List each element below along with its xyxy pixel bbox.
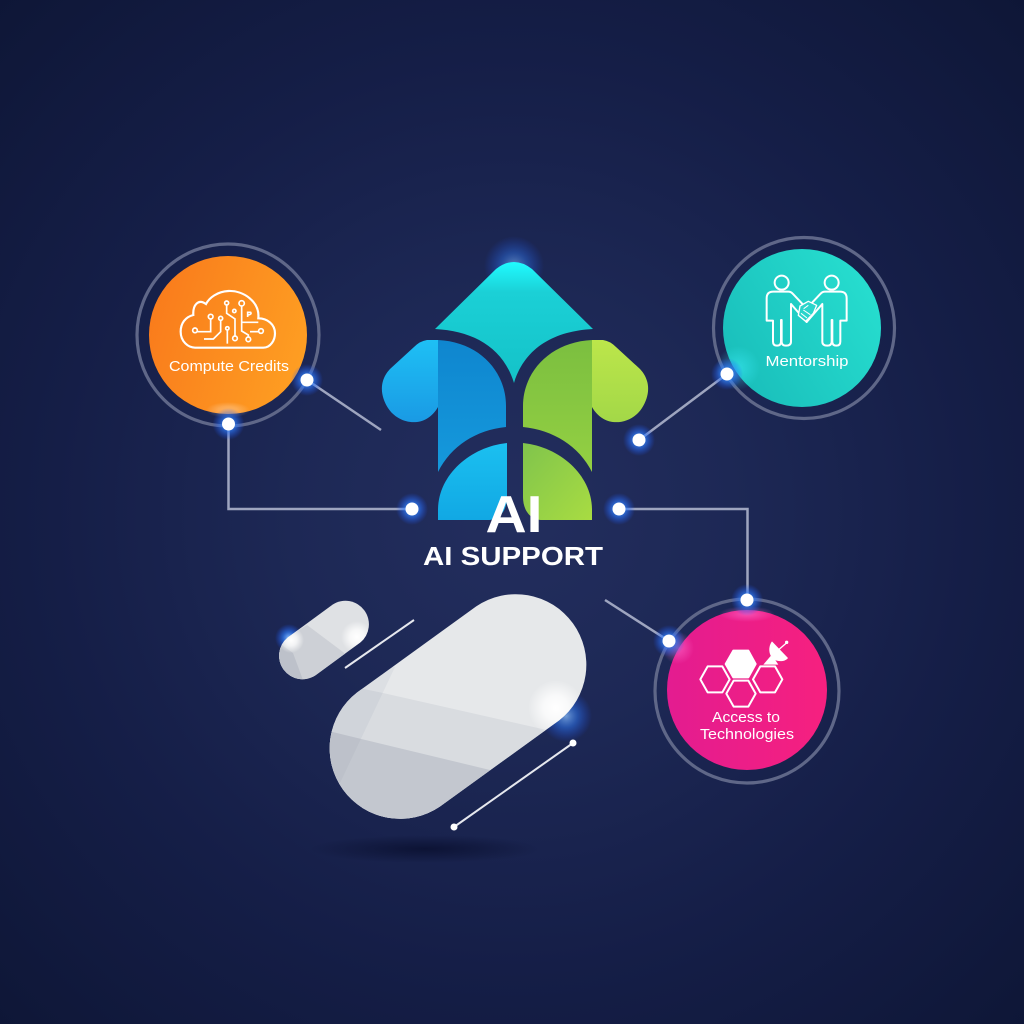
node: technologies top — [731, 584, 763, 616]
pill facets — [330, 594, 586, 819]
panel: compute credits — [137, 244, 319, 426]
accent line: long with end dots — [450, 740, 576, 830]
ring — [714, 238, 894, 418]
left highlight — [662, 632, 694, 664]
orange disc — [149, 256, 307, 414]
panel: mentorship — [714, 238, 894, 418]
large glass pill — [330, 594, 590, 819]
left body dark blue — [438, 340, 506, 472]
accent line: short — [345, 620, 414, 668]
panel: access to technologies — [655, 599, 839, 783]
bottom highlight — [206, 402, 250, 418]
top glow — [484, 236, 544, 296]
right wing light green — [592, 340, 648, 422]
label: line two: Technologies — [700, 726, 794, 743]
node: arrow right — [623, 424, 655, 456]
left wing light blue — [382, 340, 438, 422]
teal disc — [723, 249, 881, 407]
node: compute credits right — [291, 364, 323, 396]
icon: two people shaking hands — [767, 276, 847, 346]
node: technologies left — [653, 625, 685, 657]
connector: compute credits to AI hub (elbow) — [228, 424, 412, 509]
connector: access to technologies to AI hub (elbow) — [619, 509, 748, 600]
connector: access to technologies diagonal — [605, 600, 669, 641]
central arrow logo — [382, 236, 648, 520]
title: AI SUPPORT: AI SUPPORT — [423, 541, 603, 571]
glow behind pill — [275, 624, 303, 652]
pink disc — [667, 610, 827, 770]
ground shadow — [310, 835, 540, 863]
right body dark green — [523, 340, 592, 472]
node: mentorship — [711, 358, 743, 390]
ring — [655, 599, 839, 783]
connector: mentorship to arrow — [639, 374, 727, 440]
glow behind pill — [540, 690, 592, 742]
node: hub left — [396, 493, 428, 525]
title: AI: AI — [486, 486, 542, 544]
bottom right quarter green — [523, 443, 592, 520]
arrow head: teal — [435, 262, 593, 383]
label: line one: Access to — [712, 709, 780, 726]
ring — [137, 244, 319, 426]
label: Mentorship — [766, 353, 848, 370]
pill facets — [279, 600, 369, 680]
label: Compute Credits — [169, 359, 289, 375]
top highlight — [719, 606, 775, 622]
left highlight — [716, 346, 760, 390]
node: compute credits bottom — [212, 408, 244, 440]
node: hub right — [603, 493, 635, 525]
bottom left quarter blue — [438, 443, 507, 520]
icon: cloud circuit — [181, 291, 275, 348]
connector: compute credits to arrow (diagonal) — [307, 380, 381, 430]
small glass pill — [276, 600, 369, 680]
icon: hexagons and satellite dish — [700, 641, 788, 707]
